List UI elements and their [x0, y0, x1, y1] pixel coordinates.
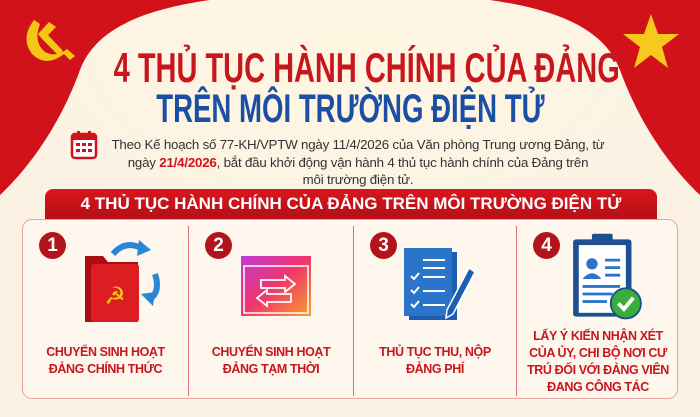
panel: procedures: [22, 219, 678, 399]
number 3: [370, 232, 397, 259]
icon: star: [623, 14, 679, 68]
label 4: CỦA ỦY, CHI BỘ NƠI CƯ: [529, 346, 667, 360]
icon: checklist with pen: [404, 248, 476, 320]
label 3: ĐẢNG PHÍ: [406, 362, 464, 376]
intro text: Theo Kế hoạch số 77-KH/VPTW ngày 11/4/2026 của Văn phòng Trung ương Đảng, từ: [111, 137, 605, 152]
title line 1: 4 THỦ TỤC HÀNH CHÍNH CỦA ĐẢNG: [114, 44, 620, 91]
number 4: [533, 232, 560, 259]
number 2: [205, 232, 232, 259]
procedure 4: [516, 226, 679, 396]
procedure 3: [353, 226, 516, 396]
section banner: 4 THỦ TỤC HÀNH CHÍNH CỦA ĐẢNG TRÊN MÔI TRƯỜNG ĐIỆN TỬ: [81, 194, 621, 213]
number 1: [39, 232, 66, 259]
icon: calendar: [70, 131, 98, 160]
icon: clipboard with check: [573, 234, 642, 320]
icon: hammer and sickle: [26, 20, 75, 61]
intro text: ngày 21/4/2026, bắt đầu khởi động vận hành 4 thủ tục hành chính của Đảng trên: [128, 154, 588, 170]
number 2: 2: [213, 235, 224, 256]
icon: folder with arrows: [85, 240, 160, 322]
label 4: [527, 328, 669, 394]
intro text: [111, 137, 605, 187]
label 2: CHUYỂN SINH HOẠT: [212, 345, 330, 359]
number 1: 1: [47, 235, 58, 256]
label 2: ĐẢNG TẠM THỜI: [223, 362, 319, 376]
icon: exchange window: [241, 256, 311, 316]
label 1: CHUYỂN SINH HOẠT: [46, 345, 165, 359]
icon: folder with arrows: ☭: [104, 283, 126, 310]
number 3: 3: [378, 235, 389, 256]
label 4: LẤY Ý KIẾN NHẬN XÉT: [533, 329, 663, 343]
label 4: ĐANG CÔNG TÁC: [547, 380, 649, 394]
label 1: [46, 344, 165, 376]
label 1: ĐẢNG CHÍNH THỨC: [49, 362, 162, 376]
label 2: [212, 344, 330, 376]
procedure 2: [188, 226, 353, 396]
title line 2: TRÊN MÔI TRƯỜNG ĐIỆN TỬ: [156, 87, 544, 131]
label 3: [379, 344, 491, 376]
section banner: [45, 189, 657, 219]
intro text: môi trường điện tử.: [303, 172, 413, 187]
number 4: 4: [541, 235, 552, 256]
procedure 1: [39, 232, 165, 376]
label 4: TRÚ ĐỐI VỚI ĐẢNG VIÊN: [527, 363, 669, 377]
label 3: THỦ TỤC THU, NỘP: [379, 345, 491, 359]
